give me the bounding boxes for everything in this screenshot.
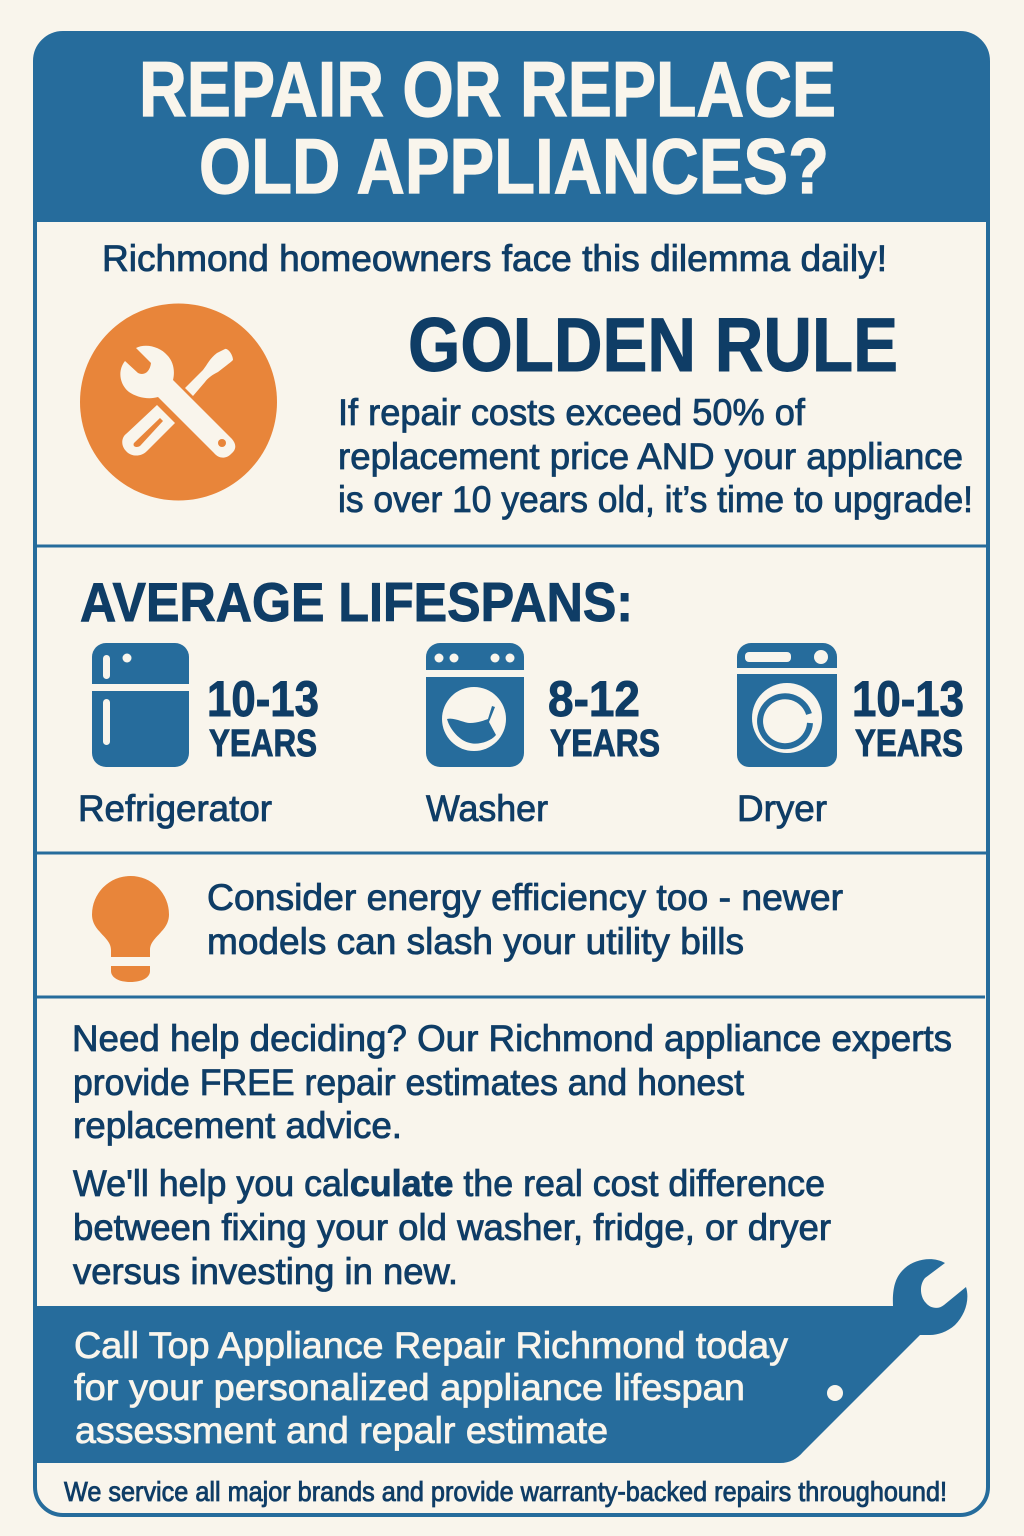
call to action text: assessment and repalr estimate bbox=[75, 1410, 608, 1451]
stat: dryer lifespan: 10-13 bbox=[852, 671, 964, 727]
title: REPAIR OR REPLACE bbox=[139, 45, 836, 133]
golden rule text: is over 10 years old, it’s time to upgrade! bbox=[338, 479, 973, 520]
call to action text bbox=[74, 1325, 789, 1451]
paragraph: cost difference bbox=[73, 1163, 831, 1292]
stat: washer lifespan: YEARS bbox=[550, 723, 660, 765]
paragraph: need help deciding bbox=[72, 1018, 952, 1146]
item: refrigerator bbox=[78, 643, 319, 829]
title bbox=[139, 45, 836, 210]
stat: washer lifespan bbox=[548, 671, 660, 765]
call to action text: Call Top Appliance Repair Richmond today bbox=[74, 1325, 789, 1366]
paragraph: cost difference: We'll help you calculate the real cost difference bbox=[73, 1163, 825, 1204]
energy efficiency text: models can slash your utility bills bbox=[207, 921, 744, 962]
item: washer bbox=[426, 643, 660, 829]
stat: refrigerator lifespan: YEARS bbox=[209, 723, 317, 765]
golden rule text: If repair costs exceed 50% of bbox=[338, 392, 806, 433]
title: OLD APPLIANCES? bbox=[199, 122, 829, 210]
paragraph: need help deciding: replacement advice. bbox=[73, 1105, 402, 1146]
paragraph: cost difference: between fixing your old washer, fridge, or dryer bbox=[73, 1207, 831, 1248]
label: washer: Washer bbox=[426, 788, 548, 829]
label: refrigerator: Refrigerator bbox=[78, 788, 272, 829]
stat: dryer lifespan: YEARS bbox=[855, 723, 963, 765]
footer note: We service all major brands and provide warranty-backed repairs throughound! bbox=[64, 1476, 947, 1507]
call to action text: for your personalized appliance lifespan bbox=[74, 1367, 745, 1408]
paragraph: cost difference: versus investing in new. bbox=[73, 1251, 458, 1292]
icon: dryer bbox=[737, 643, 837, 767]
stat: refrigerator lifespan bbox=[207, 671, 319, 765]
icon: washer bbox=[426, 643, 524, 767]
icon: refrigerator bbox=[92, 643, 189, 767]
panel: golden rule section bbox=[80, 238, 973, 520]
heading: average lifespans: AVERAGE LIFESPANS: bbox=[80, 571, 633, 633]
energy efficiency text bbox=[207, 877, 843, 962]
paragraph: need help deciding: Need help deciding? Our Richmond appliance experts bbox=[72, 1018, 952, 1059]
item: dryer bbox=[737, 643, 964, 829]
panel: expert help bbox=[72, 1018, 952, 1292]
label: dryer: Dryer bbox=[737, 788, 827, 829]
intro line: Richmond homeowners face this dilemma daily! bbox=[102, 238, 887, 279]
paragraph: need help deciding: provide FREE repair estimates and honest bbox=[73, 1062, 745, 1103]
icon: wrench and screwdriver bbox=[80, 304, 277, 500]
panel: header banner bbox=[35, 33, 988, 222]
panel: average lifespans bbox=[78, 571, 964, 829]
heading: golden rule: GOLDEN RULE bbox=[408, 303, 898, 388]
panel: call to action wrench banner bbox=[36, 1259, 967, 1463]
stat: washer lifespan: 8-12 bbox=[548, 671, 640, 727]
panel: energy efficiency tip bbox=[92, 876, 843, 982]
golden rule text bbox=[338, 392, 973, 520]
golden rule text: replacement price AND your appliance bbox=[338, 436, 963, 477]
icon: light bulb bbox=[92, 876, 169, 982]
energy efficiency text: Consider energy efficiency too - newer bbox=[207, 877, 843, 918]
stat: refrigerator lifespan: 10-13 bbox=[207, 671, 319, 727]
stat: dryer lifespan bbox=[852, 671, 964, 765]
